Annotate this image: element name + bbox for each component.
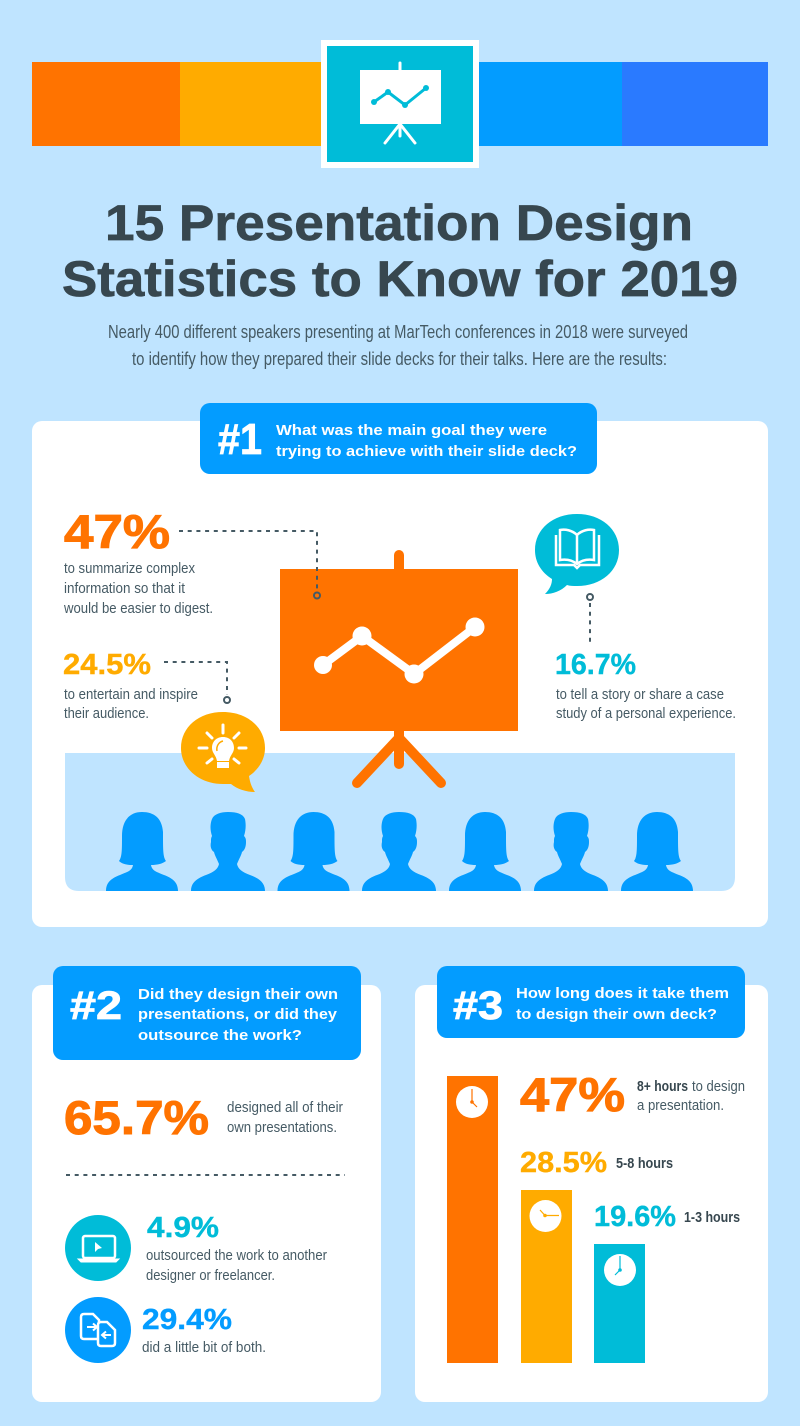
stat: 4.9 percent: outsourced the work to another	[146, 1247, 327, 1264]
heading: question 2 tab: #2	[70, 984, 122, 1028]
bar: 5-8 hours	[521, 1190, 572, 1363]
stat: 19.6 percent, 1-3 hours	[594, 1201, 740, 1233]
stat: 29.4 percent	[142, 1304, 266, 1356]
stat: 47 percent	[63, 505, 213, 617]
heading: question 3 tab: #3	[453, 984, 503, 1028]
audience backdrop	[65, 753, 735, 891]
stat: 4.9 percent	[146, 1212, 327, 1284]
stat: 47 percent: to summarize complex	[64, 560, 195, 577]
stat: 65.7 percent: 65.7%	[64, 1091, 209, 1144]
heading: question 1 tab	[200, 403, 597, 474]
header colour band with icon	[32, 40, 768, 168]
heading: question 1 tab: What was the main goal they were	[276, 422, 547, 439]
stat: 16.7 percent	[555, 649, 736, 722]
panel: question 1	[32, 403, 768, 927]
heading: question 1 tab: #1	[218, 415, 262, 464]
stat: 24.5 percent: to entertain and inspire	[64, 686, 198, 703]
bar: 1-3 hours	[594, 1244, 645, 1363]
title: Statistics to Know for 2019	[62, 251, 738, 307]
heading: question 2 tab: outsource the work?	[138, 1027, 302, 1044]
panel: question 3	[415, 966, 768, 1402]
connector: 16.7 percent	[587, 594, 593, 645]
heading: question 2 tab	[53, 966, 361, 1060]
icon: presentation board	[360, 63, 441, 143]
intro text	[108, 322, 688, 369]
stat: 24.5 percent	[63, 649, 198, 722]
stat: 47 percent: 47%	[64, 505, 170, 558]
stat: 47 percent, 8+ hours: a presentation.	[637, 1097, 724, 1114]
stat: 65.7 percent	[64, 1091, 343, 1144]
stat: 19.6 percent, 1-3 hours: 1-3 hours	[684, 1209, 740, 1226]
audience silhouettes	[106, 812, 693, 891]
stat: 24.5 percent: 24.5%	[63, 649, 151, 681]
stat: 28.5 percent, 5-8 hours	[520, 1147, 673, 1179]
stat: 65.7 percent: own presentations.	[227, 1119, 337, 1136]
stat: 47 percent: information so that it	[64, 580, 186, 597]
bar: 8+ hours	[447, 1076, 498, 1363]
stat: 19.6 percent, 1-3 hours: 19.6%	[594, 1201, 676, 1233]
stat: 47 percent, 8+ hours: 8+ hours	[637, 1078, 688, 1095]
icon: shared files	[65, 1297, 131, 1363]
panel: question 2	[32, 966, 381, 1402]
stat: 28.5 percent, 5-8 hours: 5-8 hours	[616, 1155, 673, 1172]
heading: question 3 tab: How long does it take them	[516, 985, 729, 1002]
heading: question 2 tab: Did they design their own	[138, 986, 338, 1003]
stat: 4.9 percent: designer or freelancer.	[146, 1267, 275, 1284]
stat: 28.5 percent, 5-8 hours: 28.5%	[520, 1147, 607, 1179]
stat: 47 percent, 8+ hours: to design	[692, 1078, 745, 1095]
connector: 47 percent	[179, 531, 320, 598]
bar chart: hours spent	[447, 1076, 645, 1363]
stat: 24.5 percent: their audience.	[64, 705, 149, 722]
stat: 29.4 percent: did a little bit of both.	[142, 1339, 266, 1356]
stat: 4.9 percent: 4.9%	[147, 1212, 219, 1244]
icon: laptop	[65, 1215, 131, 1281]
stat: 16.7 percent: study of a personal experience.	[556, 705, 736, 722]
heading: question 2 tab: presentations, or did they	[138, 1006, 338, 1023]
title: 15 Presentation Design	[105, 195, 693, 251]
presentation board illustration	[280, 555, 518, 783]
heading: question 3 tab: to design their own deck?	[516, 1006, 717, 1023]
intro text: Nearly 400 different speakers presenting at MarTech conferences in 2018 were surveyed	[108, 322, 688, 342]
connector: 24.5 percent	[164, 662, 230, 703]
stat: 16.7 percent: to tell a story or share a case	[556, 686, 724, 703]
stat: 47 percent, 8+ hours	[520, 1068, 745, 1121]
icon: book speech bubble	[535, 514, 619, 594]
stat: 47 percent: would be easier to digest.	[63, 600, 213, 617]
icon: light bulb speech bubble	[181, 712, 265, 792]
stat: 47 percent, 8+ hours: 47%	[520, 1068, 625, 1121]
intro text: to identify how they prepared their slide decks for their talks. Here are the results:	[132, 349, 667, 369]
stat: 65.7 percent: designed all of their	[227, 1099, 343, 1116]
stat: 16.7 percent: 16.7%	[555, 649, 636, 681]
heading: question 1 tab: trying to achieve with their slide deck?	[276, 443, 577, 460]
title	[62, 195, 738, 307]
stat: 29.4 percent: 29.4%	[142, 1304, 232, 1336]
heading: question 3 tab	[437, 966, 745, 1038]
